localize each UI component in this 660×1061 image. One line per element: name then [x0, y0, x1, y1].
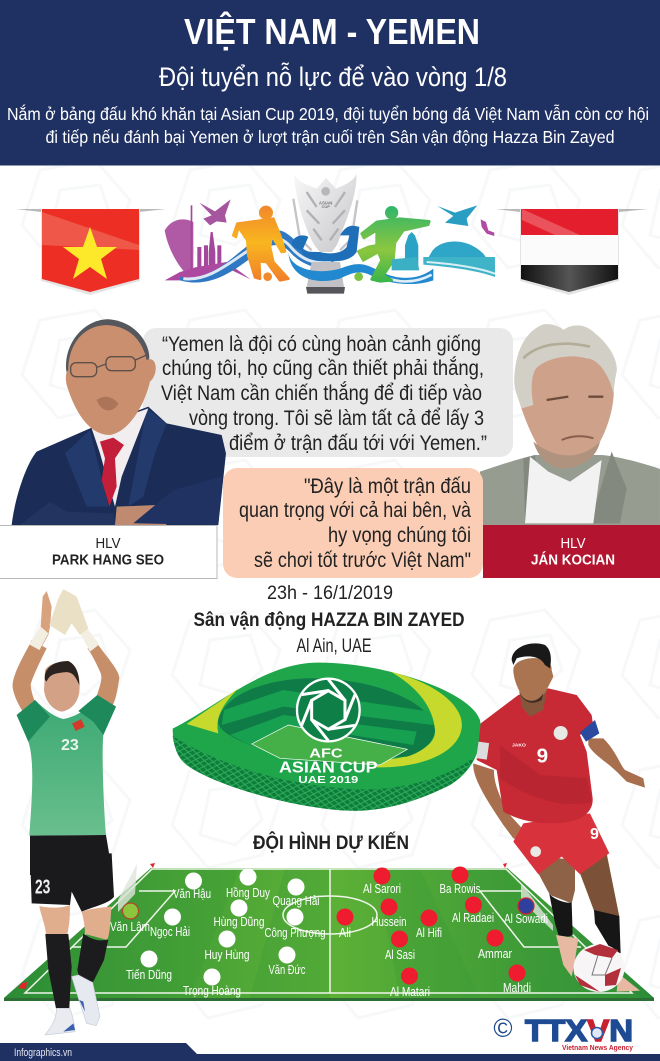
boots — [556, 935, 578, 977]
player name labels: Quang Hải — [272, 893, 320, 908]
quote text: Ján Kocian: quan trọng với cả hai bên, và — [239, 499, 471, 522]
quote text: Ján Kocian: sẽ chơi tốt trước Việt Nam" — [254, 549, 471, 572]
upper body: JAKO — [512, 743, 526, 749]
bowl — [218, 678, 435, 763]
icon: teal tower and dome — [392, 232, 495, 277]
match info — [194, 582, 464, 657]
shirt — [525, 457, 602, 523]
pitch — [252, 725, 407, 765]
header panel — [0, 0, 660, 166]
title: VIỆT NAM - YEMEN — [184, 10, 480, 52]
label: coach Ján Kocian — [483, 525, 660, 578]
socks — [45, 934, 72, 1008]
shoes — [45, 1008, 75, 1035]
face — [66, 325, 156, 435]
player name labels — [110, 881, 548, 999]
heading: expected lineups: ĐỘI HÌNH DỰ KIẾN — [253, 830, 409, 854]
upper body: 9 — [590, 826, 599, 843]
player name labels: Al Radaei — [452, 910, 494, 925]
match info: Al Ain, UAE — [296, 635, 372, 657]
details: 9 — [537, 744, 548, 767]
peach quote bubble — [223, 468, 483, 578]
player name labels: Trọng Hoàng — [183, 983, 241, 998]
lattice wall — [173, 736, 475, 811]
logo wordmark: UAE 2019 — [298, 775, 359, 786]
quote text: Park Hang Seo: chúng tôi, họ cũng cần thiết phải thắng, — [162, 357, 484, 380]
quote text: Ján Kocian: hy vọng chúng tôi — [328, 524, 471, 547]
quote text: Park Hang Seo — [161, 333, 487, 455]
photo: coach Ján Kocian — [480, 324, 660, 525]
shorts — [513, 813, 609, 874]
icon: green player — [358, 207, 429, 281]
head — [44, 663, 80, 712]
glasses — [71, 355, 147, 377]
Yemen team markers — [336, 866, 534, 984]
football pitch — [4, 863, 654, 1001]
armband — [580, 720, 599, 742]
upper body — [13, 589, 119, 875]
icon: trophy: CUP — [321, 204, 330, 209]
legs skin — [39, 905, 70, 934]
TTXVN logo — [493, 1013, 634, 1052]
upper body — [473, 643, 645, 874]
player name labels: Al Sarori — [363, 881, 401, 896]
player name labels: Văn Hậu — [173, 886, 211, 901]
label: coach Ján Kocian: JÁN KOCIAN — [531, 552, 615, 568]
quote text: Park Hang Seo: vòng trong. Tôi sẽ làm tất cả để lấy 3 — [189, 407, 484, 430]
quote text: Ján Kocian: "Đây là một trận đấu — [304, 475, 471, 498]
shorts top — [30, 835, 113, 875]
yellow rim — [187, 672, 462, 767]
icon: match ball — [574, 944, 624, 992]
quote text: Park Hang Seo: “Yemen là đội có cùng hoàn cảnh giống — [162, 333, 481, 356]
player photo: Yemen number 9 — [473, 643, 645, 992]
flag: Yemen — [496, 209, 648, 295]
lower body: 23 — [35, 876, 50, 898]
ribbon centre — [292, 226, 359, 261]
player name labels: Tiến Dũng — [126, 967, 172, 982]
player name labels: Công Phượng — [264, 925, 326, 940]
player name labels: Al Sowadi — [504, 911, 548, 926]
footer bar — [0, 1043, 660, 1061]
Asian Cup banner illustration — [165, 174, 495, 294]
label: coach Park Hang Seo — [0, 526, 217, 578]
copyright mark: © — [493, 1013, 513, 1043]
hands and gloves — [29, 591, 52, 650]
label: coach Park Hang Seo: PARK HANG SEO — [52, 552, 164, 568]
icon: teal bird — [437, 205, 477, 226]
crossed arms — [20, 502, 115, 525]
label: coach Ján Kocian: HLV — [560, 536, 586, 552]
logo wordmark: ASIAN CUP — [279, 759, 378, 776]
stadium body — [173, 663, 481, 811]
logo wordmark — [279, 746, 378, 786]
player name labels: Al Hifi — [416, 925, 442, 940]
player name labels: Ngọc Hải — [150, 924, 190, 939]
jersey — [477, 688, 593, 823]
player name labels: Mahdi — [503, 980, 531, 995]
icon: purple sail tower skyline — [165, 205, 251, 280]
player photo: goalkeeper Văn Lâm — [13, 589, 119, 1035]
quote text: Ján Kocian — [239, 475, 471, 572]
player name labels: Hussein — [372, 914, 406, 929]
icon: trophy — [293, 174, 357, 294]
match info: 23h - 16/1/2019 — [267, 582, 393, 604]
neck and head — [519, 687, 547, 717]
socks — [549, 894, 573, 940]
player name labels: Ammar — [478, 946, 513, 961]
icon: orange ball — [263, 272, 272, 281]
hair back — [66, 319, 149, 390]
suit — [12, 407, 226, 525]
intro text: đi tiếp nếu đánh bại Yemen ở lượt trận cuối trên Sân vận động Hazza Bin Zayed — [46, 127, 614, 147]
icon: purple bird — [199, 199, 231, 225]
quote text: Park Hang Seo: Việt Nam cần chiến thắng để đi tiếp vào — [161, 382, 482, 405]
Vietnam team markers — [122, 868, 304, 986]
subtitle: Đội tuyển nỗ lực để vào vòng 1/8 — [159, 62, 507, 92]
player name labels: Al Matari — [390, 984, 430, 999]
photo: coach Park Hang Seo — [12, 319, 226, 525]
goal right — [521, 883, 553, 931]
icon: green ball — [354, 272, 363, 281]
goal left — [118, 864, 137, 912]
hair — [514, 324, 617, 408]
stadium with AFC Asian Cup logo — [173, 663, 481, 811]
logo wordmark: AFC — [309, 746, 343, 761]
TTXVN wordmark: TTXVN — [525, 1013, 633, 1048]
source credit: Infographics.vn — [14, 1047, 72, 1059]
lower body — [30, 853, 114, 1035]
player name labels: Hùng Dũng — [214, 914, 264, 929]
player name labels: Ba Rowis — [440, 881, 481, 896]
intro text — [7, 103, 649, 147]
gray quote bubble — [143, 328, 513, 457]
player name labels: Ali — [339, 925, 351, 940]
jacket — [480, 455, 660, 525]
arms — [473, 763, 529, 842]
ribbon left — [180, 230, 333, 283]
match info: Sân vận động HAZZA BIN ZAYED — [194, 609, 464, 631]
jersey — [17, 695, 116, 836]
logo emblem — [297, 679, 360, 741]
corner flags — [18, 863, 507, 989]
upper body: 23 — [61, 737, 79, 754]
legs — [538, 853, 640, 992]
player name labels: Văn Lâm — [110, 919, 150, 934]
agency tagline: Vietnam News Agency — [562, 1043, 634, 1052]
quote text: Park Hang Seo: điểm ở trận đấu tới với Yemen.” — [229, 432, 487, 455]
player name labels: Văn Đức — [268, 962, 306, 977]
face — [518, 340, 614, 466]
icon: globe on V — [592, 1028, 602, 1038]
icon: orange player — [233, 207, 288, 280]
flag: Vietnam — [16, 209, 166, 295]
icon: pink shape at right — [481, 219, 494, 236]
shirt and tie — [92, 408, 148, 507]
label: coach Park Hang Seo: HLV — [96, 536, 121, 552]
icon: trophy: ASIAN — [319, 200, 332, 205]
player name labels: Hồng Duy — [226, 885, 270, 900]
player name labels: Al Sasi — [385, 947, 415, 962]
player name labels: Huy Hùng — [204, 947, 250, 962]
arms — [13, 640, 47, 715]
